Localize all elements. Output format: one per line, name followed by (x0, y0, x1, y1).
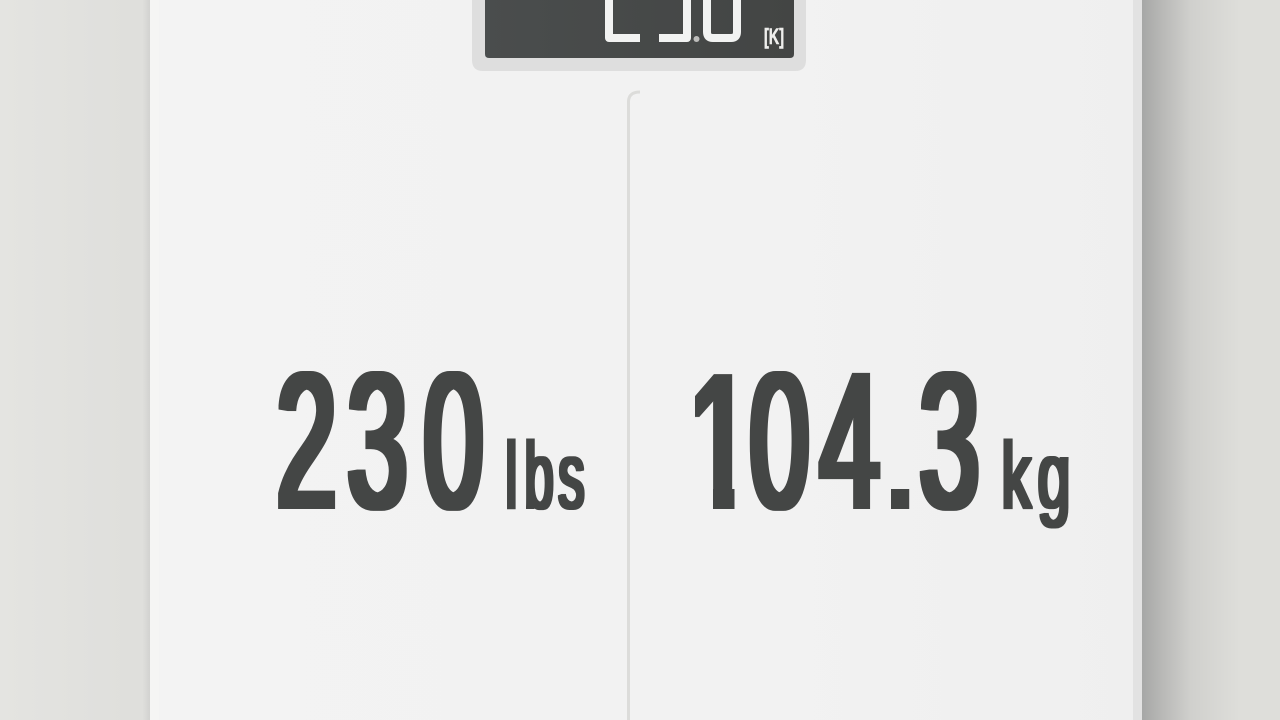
left edge shadow (143, 0, 150, 720)
unit: lbs: lbs (506, 424, 585, 529)
LCD digit 3 (659, 0, 687, 38)
number: 230: 230 (277, 333, 483, 548)
LCD digit 2 (609, 0, 640, 38)
display housing (472, 0, 806, 71)
weight in pounds (277, 333, 585, 548)
number: 04.3 of 104.3: 04.3 (750, 333, 979, 548)
weight in kilograms (695, 371, 1069, 528)
LCD decimal point (694, 36, 700, 42)
right drop shadow (1142, 0, 1240, 720)
LCD screen (485, 0, 794, 58)
scale body (150, 0, 1142, 720)
unit: kg: kg (1002, 421, 1070, 528)
LCD digit 0 (707, 0, 737, 38)
LCD unit: [K] (764, 24, 784, 49)
number: 1 of 104.3: 1 (690, 331, 751, 551)
centre seam (628, 92, 640, 720)
